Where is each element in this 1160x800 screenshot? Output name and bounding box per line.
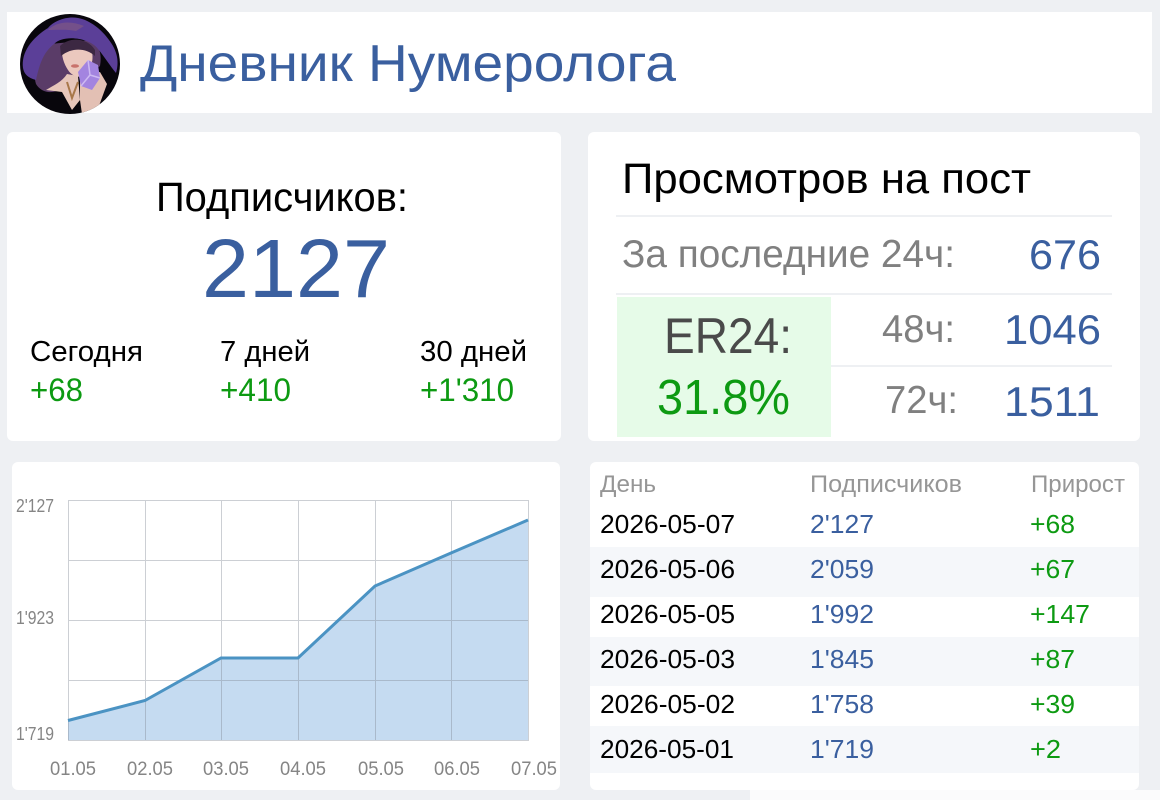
- table row 2026-05-03: 1'845: [810, 644, 874, 674]
- views 48h row: [882, 306, 1101, 353]
- stat: 30 days: 30 дней: [420, 336, 527, 368]
- table row 2026-05-05: +147: [1030, 599, 1090, 629]
- y axis labels: [16, 496, 54, 744]
- stat: today: Сегодня: [30, 336, 143, 368]
- views 24h row: 676: [1029, 231, 1101, 278]
- table row 2026-05-01: 1'719: [810, 734, 874, 764]
- stat: 30 days: [420, 336, 527, 408]
- stat: 30 days: +1'310: [420, 372, 514, 408]
- table row 2026-05-07: 2026-05-07: [600, 509, 735, 539]
- table row 2026-05-06: 2'059: [810, 554, 874, 584]
- x axis labels: [50, 759, 557, 780]
- views 72h row: [885, 378, 1100, 425]
- views 48h row: 48ч:: [882, 308, 955, 351]
- views 48h row: 1046: [1004, 306, 1101, 353]
- y axis labels: 1'923: [16, 608, 54, 628]
- table row 2026-05-05: 2026-05-05: [600, 599, 735, 629]
- table row 2026-05-07: +68: [1030, 509, 1075, 539]
- table row 2026-05-02: [600, 689, 1075, 719]
- views 72h row: 72ч:: [885, 379, 958, 422]
- views heading: Просмотров на пост: [622, 155, 1031, 203]
- table row 2026-05-05: 1'992: [810, 599, 874, 629]
- table row 2026-05-02: 1'758: [810, 689, 874, 719]
- x axis labels: 03.05: [203, 759, 249, 780]
- views 24h row: [622, 231, 1101, 278]
- subscribers total: 2127: [202, 222, 390, 315]
- subscribers heading: Подписчиков:: [156, 174, 408, 220]
- panel: views per post: [588, 132, 1140, 441]
- title: Дневник Нумеролога: [140, 35, 676, 93]
- y axis labels: 2'127: [16, 496, 54, 516]
- table row 2026-05-03: +87: [1030, 644, 1075, 674]
- stat: today: [30, 336, 143, 408]
- ER24 highlight: ER24:: [664, 308, 792, 364]
- x axis labels: 01.05: [50, 759, 96, 780]
- table row 2026-05-01: [600, 734, 1061, 764]
- ER24 highlight: 31.8%: [657, 371, 790, 425]
- x axis labels: 05.05: [358, 759, 404, 780]
- table row 2026-05-02: +39: [1030, 689, 1075, 719]
- x axis labels: 07.05: [511, 759, 557, 780]
- table header: [600, 471, 1125, 498]
- x axis labels: 04.05: [280, 759, 326, 780]
- icon: avatar of a witch holding a crystal: [20, 14, 120, 114]
- table row 2026-05-01: +2: [1030, 734, 1061, 764]
- views 72h row: 1511: [1004, 378, 1100, 425]
- x axis labels: 02.05: [127, 759, 173, 780]
- table row 2026-05-07: [600, 509, 1075, 539]
- panel: subscribers: [7, 132, 561, 441]
- panel: subscriber growth chart: [12, 462, 560, 790]
- x axis labels: 06.05: [434, 759, 480, 780]
- header panel: [7, 12, 1152, 114]
- table header: День: [600, 471, 656, 498]
- stat: 7 days: [220, 336, 310, 408]
- table row 2026-05-03: [600, 644, 1075, 674]
- stat: today: +68: [30, 372, 83, 408]
- ER24 highlight: [617, 297, 831, 437]
- table row 2026-05-02: 2026-05-02: [600, 689, 735, 719]
- table row 2026-05-03: 2026-05-03: [600, 644, 735, 674]
- table row 2026-05-05: [600, 599, 1090, 629]
- area chart: [68, 500, 528, 741]
- panel: daily table: [590, 462, 1139, 790]
- table row 2026-05-06: 2026-05-06: [600, 554, 735, 584]
- table row 2026-05-06: [600, 554, 1075, 584]
- table header: Прирост: [1031, 471, 1125, 498]
- table row 2026-05-06: +67: [1030, 554, 1075, 584]
- table row 2026-05-07: 2'127: [810, 509, 874, 539]
- table row 2026-05-01: 2026-05-01: [600, 734, 734, 764]
- stat: 7 days: +410: [220, 372, 291, 408]
- y axis labels: 1'719: [16, 724, 54, 744]
- table header: Подписчиков: [810, 471, 962, 498]
- stat: 7 days: 7 дней: [220, 336, 310, 368]
- views 24h row: За последние 24ч:: [622, 233, 955, 276]
